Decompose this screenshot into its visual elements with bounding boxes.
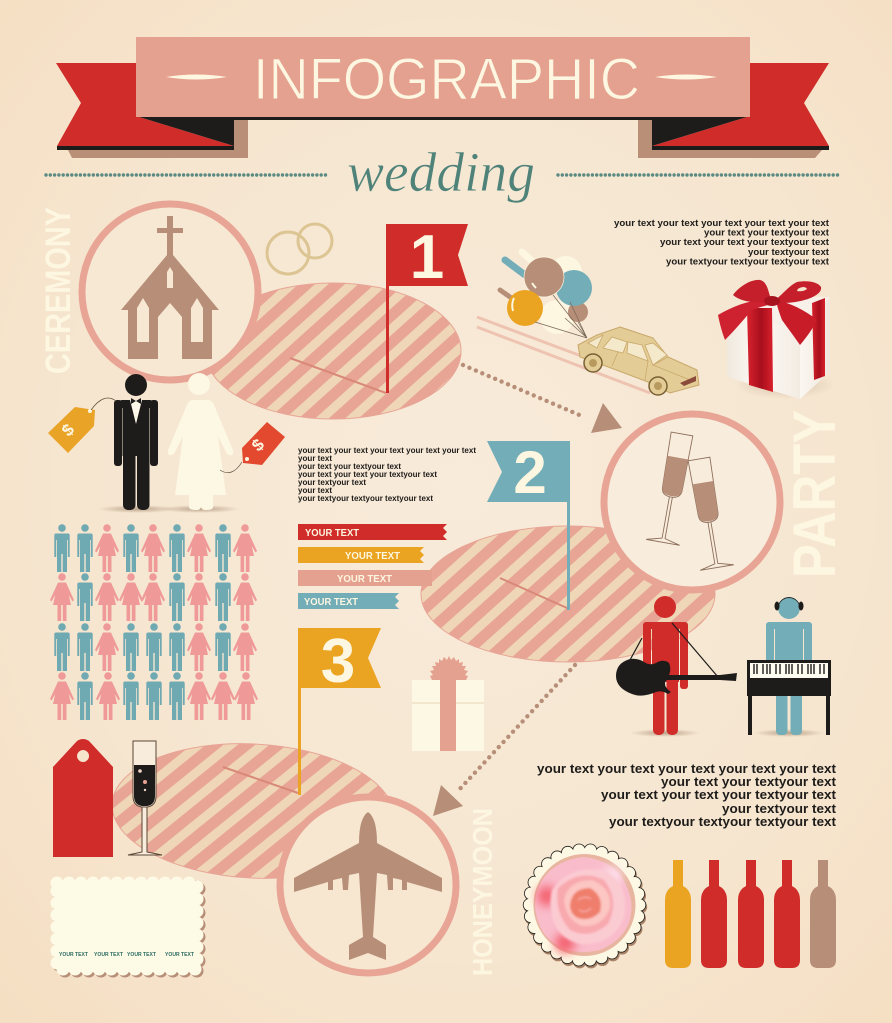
icon: red price tag — [53, 739, 113, 857]
icon: rose — [535, 857, 631, 953]
dotted arrow to honeymoon — [433, 665, 575, 816]
card shadow edge — [59, 885, 199, 971]
keyboard player — [747, 597, 831, 735]
card labels: YOUR TEXT — [59, 952, 89, 958]
gift box faces — [727, 310, 800, 399]
speed streaks — [477, 317, 650, 393]
circle: ceremony — [82, 204, 258, 380]
row 3 — [54, 623, 257, 671]
text block: lower right notes: your text your text your text your text your text — [537, 761, 837, 776]
groom and bride with tags — [48, 373, 285, 513]
left ribbon tail — [56, 63, 234, 150]
banner title: INFOGRAPHIC — [253, 47, 640, 112]
section label party: PARTY — [781, 410, 848, 578]
red price tag — [220, 422, 285, 473]
card labels: YOUR TEXT — [127, 952, 157, 958]
bottle red 1 — [701, 860, 727, 968]
flag number 1: 1 — [410, 223, 444, 292]
flag 2 — [487, 439, 570, 610]
card panel — [57, 883, 197, 969]
icon: airplane — [294, 812, 442, 960]
banner — [56, 37, 829, 158]
text block: top right notes: your textyour textyour textyour text — [666, 256, 830, 268]
text block: flag 2 notes: your textyour text — [298, 478, 366, 487]
card labels: YOUR TEXT — [165, 952, 195, 958]
ribbon folds — [136, 116, 750, 146]
icon: champagne flute — [128, 741, 162, 855]
flag number 3: 3 — [321, 627, 355, 696]
bottle tan — [810, 860, 836, 968]
bride — [168, 373, 233, 510]
striped ellipse 2 — [421, 526, 715, 662]
text block: flag 2 notes: your textyour textyour textyour text — [298, 494, 433, 503]
flag shadow line — [223, 767, 298, 793]
ribbon red — [298, 524, 447, 540]
text block: lower right notes: your textyour text — [722, 801, 837, 816]
crowd of people pictogram — [50, 524, 258, 720]
text block: lower right notes: your text your text your textyour text — [601, 787, 837, 802]
dotted divider right — [558, 173, 840, 177]
section label ceremony: CEREMONY — [39, 207, 78, 374]
icon: champagne glass right — [682, 456, 734, 570]
ribbon pink — [298, 570, 432, 586]
icon: balloons — [500, 252, 592, 338]
text block: top right notes: your text your text your text your text your text — [614, 218, 830, 229]
text block: top right notes — [614, 218, 830, 268]
ground shadows — [97, 505, 177, 513]
icon: keyboard — [747, 660, 831, 735]
gift bow — [718, 300, 772, 340]
row 2 — [50, 573, 257, 621]
orange price tag — [48, 398, 116, 453]
card labels: YOUR TEXT — [94, 952, 124, 958]
ribbon teal: YOUR TEXT — [304, 596, 359, 608]
text block: flag 2 notes: your text — [298, 454, 332, 463]
icon: bottles — [665, 860, 836, 968]
flag shadow line — [500, 578, 567, 608]
flag 3 — [223, 627, 381, 795]
icon: champagne glass left — [646, 431, 699, 545]
ribbon red: YOUR TEXT — [305, 527, 360, 539]
striped ellipse 3 — [109, 737, 397, 885]
circle: party — [604, 414, 780, 590]
row 1 — [54, 524, 257, 572]
ribbon teal — [298, 593, 399, 609]
text block: lower right notes: your textyour textyour textyour text — [609, 814, 837, 829]
ground shadows — [630, 729, 700, 737]
bottle red 3 — [774, 860, 800, 968]
dotted arrow to party — [463, 365, 622, 433]
icon: small gift — [412, 656, 484, 751]
icon: church — [121, 216, 219, 359]
flag number 2: 2 — [513, 439, 547, 506]
musicians — [616, 596, 831, 737]
flourish right — [655, 74, 717, 80]
section label honeymoon: HONEYMOON — [467, 808, 498, 976]
red price tag: $ — [248, 435, 269, 455]
flourish left — [166, 74, 227, 80]
banner panel — [136, 37, 750, 117]
text block: top right notes: your text your textyour text — [704, 228, 830, 238]
subtitle wedding: wedding — [347, 142, 535, 204]
bottle red 2 — [738, 860, 764, 968]
icon: car — [578, 327, 699, 395]
orange price tag: $ — [58, 420, 79, 440]
gift ribbon — [747, 308, 773, 392]
striped ellipse 1 — [205, 283, 461, 419]
flag shadow line — [290, 358, 386, 393]
ribbon orange — [298, 547, 424, 563]
card labels — [59, 952, 195, 958]
ribbon orange: YOUR TEXT — [345, 550, 401, 562]
gift shadow — [735, 371, 835, 399]
flag 1 — [290, 223, 468, 393]
text block: lower right notes — [537, 761, 837, 829]
text block: flag 2 notes: your text — [298, 486, 332, 495]
row 4 — [50, 672, 258, 720]
ribbon pink: YOUR TEXT — [337, 573, 393, 585]
bottle orange — [665, 860, 691, 968]
text block: flag 2 notes — [298, 446, 476, 503]
banner shadow — [68, 120, 822, 158]
icon: wedding rings — [267, 224, 332, 274]
icon: gift box with red bow — [718, 280, 835, 399]
text block: flag 2 notes: your text your text your textyour text — [298, 470, 437, 479]
text block: lower right notes: your text your textyour text — [661, 774, 837, 789]
rose badge — [530, 850, 640, 962]
groom — [114, 374, 158, 510]
circle: honeymoon — [280, 797, 456, 973]
icon: guitar — [616, 659, 737, 696]
dotted divider left — [46, 173, 328, 177]
text block: top right notes: your text your text your textyour text — [660, 237, 830, 248]
ribbon labels — [298, 524, 447, 609]
guitarist — [616, 596, 737, 735]
scalloped card — [57, 883, 199, 971]
text block: top right notes: your textyour text — [748, 247, 830, 258]
text block: flag 2 notes: your text your textyour text — [298, 462, 401, 471]
right ribbon tail — [652, 63, 829, 150]
text block: flag 2 notes: your text your text your text your text your text — [298, 446, 476, 455]
